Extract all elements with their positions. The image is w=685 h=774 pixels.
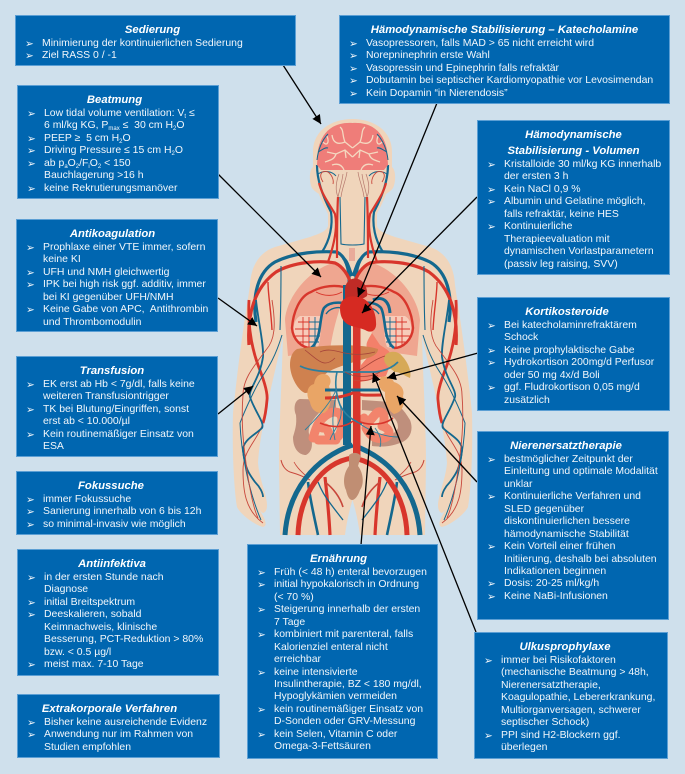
list: Transfusion: erst ab < 10.000/µl <box>43 416 130 427</box>
heading: Volumen: Stabilisierung - Volumen <box>507 144 640 156</box>
list: Sedierung <box>26 38 243 61</box>
list: Ernaehrung: Hypoglykämien vermeiden <box>274 691 397 702</box>
arrow: Ulkusprophylaxe to stomach <box>373 373 476 632</box>
list: Volumen: Kein NaCl 0,9 % <box>504 184 581 195</box>
list: Transfusion: ESA <box>43 441 64 452</box>
trachea <box>349 248 355 261</box>
heading: Beatmung: Beatmung <box>87 94 142 106</box>
list: Nierenersatztherapie: Kein Vorteil einer frühen <box>504 541 615 552</box>
list: Antikoagulation: Keine Gabe von APC, Antithrombin <box>43 304 208 315</box>
list: Nierenersatztherapie: Dosis: 20-25 ml/kg/h <box>504 578 599 589</box>
heading: Ulkusprophylaxe: Ulkusprophylaxe <box>519 641 611 653</box>
arrow: Beatmung to lung <box>218 174 321 277</box>
list: Nierenersatztherapie: SLED gegenüber <box>504 504 584 515</box>
list: Antikoagulation: und Thrombomodulin <box>43 317 141 328</box>
list: Beatmung: PEEP ≥ 5 cm H2O <box>44 133 131 145</box>
list: Kortikosteroide: zusätzlich <box>504 395 550 406</box>
panel: Katecholamine <box>339 15 670 104</box>
list: Ernaehrung: keine intensivierte <box>274 666 358 678</box>
body right half <box>352 119 472 535</box>
panel: Transfusion <box>16 356 218 457</box>
list: Transfusion: Kein routinemäßiger Einsatz von <box>43 429 194 440</box>
list: Antikoagulation: keine KI <box>43 254 81 265</box>
list: Kortikosteroide: oder 50 mg 4x/d Boli <box>504 370 600 381</box>
list: Volumen: Kontinuierliche <box>504 221 572 232</box>
list: Volumen: (passiv leg raising, SVV) <box>504 258 618 270</box>
list: Antikoagulation: Prophlaxe einer VTE immer, sofern <box>43 242 205 253</box>
list: Volumen: Albumin und Gelatine möglich, <box>504 196 646 207</box>
list: Extrakorporale Verfahren: Bisher keine ausreichende Evidenz <box>44 717 207 728</box>
list: Kortikosteroide: Hydrokortison 200mg/d Perfusor <box>504 357 654 368</box>
list: Ernaehrung: erreichbar <box>274 654 321 665</box>
list: Fokussuche: so minimal-invasiv wie möglich <box>43 519 186 530</box>
list: Ernaehrung: (< 70 %) <box>274 592 314 603</box>
list: Nierenersatztherapie: hämodynamische Stabilität <box>504 529 629 540</box>
small intestine <box>313 412 389 440</box>
list: Ulkusprophylaxe: Nierenersatztherapie, <box>501 680 601 691</box>
list: Transfusion: TK bei Blutung/Eingriffen, sonst <box>43 404 189 415</box>
list: Beatmung: Driving Pressure ≤ 15 cm H2O <box>44 145 183 157</box>
list: Transfusion: EK erst ab Hb < 7g/dl, falls keine <box>43 379 195 390</box>
list: Kortikosteroide: Keine prophylaktische Gabe <box>504 345 635 356</box>
list: Antikoagulation <box>27 242 208 328</box>
list: Kortikosteroide: Schock <box>504 332 538 343</box>
heading: Fokussuche: Fokussuche <box>78 480 144 492</box>
arrow: Ernaehrung to intestine <box>361 426 371 545</box>
list: Katecholamine <box>350 38 653 99</box>
panel: Ernaehrung <box>247 544 438 759</box>
list: Volumen <box>488 159 661 270</box>
list: Volumen: Therapieevaluation mit <box>504 234 610 245</box>
heading: Ernaehrung: Ernährung <box>310 553 367 565</box>
list: Ulkusprophylaxe: Multiorganversagen, schwerer <box>501 705 641 716</box>
list: Beatmung: keine Rekrutierungsmanöver <box>44 183 177 194</box>
list: Antiinfektiva: Keimnachweis, klinische <box>44 622 157 633</box>
panel: Antiinfektiva <box>17 549 219 676</box>
heading: Antiinfektiva: Antiinfektiva <box>78 558 146 570</box>
right colon <box>362 400 412 447</box>
central vessels <box>343 285 360 459</box>
heading: Volumen <box>507 129 640 156</box>
list: Ernaehrung: Früh (< 48 h) enteral bevorzugen <box>274 567 427 578</box>
list: Antikoagulation: IPK bei high risk ggf. additiv, immer <box>43 279 206 290</box>
list: Fokussuche <box>27 494 201 530</box>
heart <box>340 278 390 332</box>
list: Katecholamine: Norepninephrin erste Wahl <box>366 50 490 61</box>
list: Antikoagulation: UFH und NMH gleichwertig <box>43 267 169 278</box>
arrow: Transfusion to arm vessels <box>218 386 253 414</box>
list: Beatmung: Bauchlagerung >16 h <box>44 170 144 181</box>
panel: Kortikosteroide <box>477 297 670 411</box>
list: Nierenersatztherapie: Kontinuierliche Verfahren und <box>504 491 641 502</box>
body left half <box>233 119 352 535</box>
heading: Antikoagulation: Antikoagulation <box>70 228 155 240</box>
heading: Katecholamine: Hämodynamische Stabilisierung – Katecholamine <box>371 24 638 36</box>
arrow: Nierenersatztherapie to kidney <box>397 396 477 482</box>
left colon <box>293 399 336 455</box>
list: Ernaehrung: D-Sonden oder GRV-Messung <box>274 716 415 727</box>
list: Nierenersatztherapie <box>488 454 658 602</box>
list: Antiinfektiva: initial Breitspektrum <box>44 597 135 608</box>
list: Beatmung: ab paO2/FiO2 < 150 <box>44 158 131 170</box>
panel: Extrakorporale Verfahren <box>17 694 220 758</box>
heading: Nierenersatztherapie: Nierenersatztherapie <box>510 440 622 452</box>
list: Volumen: dynamischen Vorlastparametern <box>504 246 654 257</box>
list: Volumen: falls refraktär, keine HES <box>504 209 619 220</box>
left kidney <box>307 374 331 413</box>
right kidney <box>379 376 404 414</box>
panel: Volumen <box>477 120 670 275</box>
list: Extrakorporale Verfahren <box>28 717 207 753</box>
list: Ulkusprophylaxe: immer bei Risikofaktoren <box>501 655 616 666</box>
list: Nierenersatztherapie: Einleitung und optimale Modalität <box>504 466 658 477</box>
list: Ernaehrung: 7 Tage <box>274 617 305 628</box>
list: Ernaehrung: Steigerung innerhalb der ersten <box>274 604 420 615</box>
list: Katecholamine: Kein Dopamin “in Nierendosis” <box>366 88 508 99</box>
panel: Ulkusprophylaxe <box>474 632 668 759</box>
heading: Volumen: Hämodynamische <box>525 129 622 141</box>
list: Beatmung: Low tidal volume ventilation: Vt ≤ <box>44 108 195 120</box>
heading: Transfusion: Transfusion <box>80 365 144 377</box>
list: Ernaehrung <box>258 567 427 752</box>
list: Katecholamine: Dobutamin bei septischer Kardiomyopathie vor Levosimendan <box>366 75 653 86</box>
list: Ulkusprophylaxe: Koagulopathie, Lebererkrankung, <box>501 692 655 703</box>
panel: Beatmung <box>17 85 219 199</box>
abdominal vessels <box>300 350 398 447</box>
list: Antiinfektiva: Diagnose <box>44 584 88 595</box>
heading: Extrakorporale Verfahren: Extrakorporale Verfahren <box>42 703 177 715</box>
panel: Antikoagulation <box>16 219 218 332</box>
list: Ernaehrung: Omega-3-Fettsäuren <box>274 741 371 752</box>
heading: Kortikosteroide: Kortikosteroide <box>525 306 609 318</box>
list: Ernaehrung: Kalorienziel enteral nicht <box>274 642 388 653</box>
list: Fokussuche: immer Fokussuche <box>43 494 131 505</box>
arrow: Katecholamine to heart <box>358 103 437 297</box>
list: Transfusion: weiteren Transfusiontrigger <box>43 391 169 402</box>
list: Kortikosteroide: ggf. Fludrokortison 0,05 mg/d <box>504 382 640 393</box>
list: Transfusion <box>27 379 195 452</box>
list: Ernaehrung: kombiniert mit parenteral, falls <box>274 629 413 640</box>
arrow: Volumen to heart <box>362 197 477 313</box>
list: Antiinfektiva: Deeskalieren, sobald <box>44 609 141 620</box>
list: Antikoagulation: bei KI gegenüber UFH/NMH <box>43 292 174 303</box>
list: Nierenersatztherapie: diskontinuierlichen bessere <box>504 516 630 527</box>
liver <box>290 345 378 393</box>
list: Katecholamine: Vasopressoren, falls MAD > 65 nicht erreicht wird <box>366 38 594 49</box>
list: Ulkusprophylaxe: PPI sind H2-Blockern ggf. <box>501 730 621 741</box>
list: Ulkusprophylaxe: septischer Schock) <box>501 717 589 728</box>
list: Volumen: Kristalloide 30 ml/kg KG innerhalb <box>504 159 661 170</box>
list: Ernaehrung: kein Selen, Vitamin C oder <box>274 729 397 740</box>
list: Nierenersatztherapie: Initiierung, deshalb bei absoluten <box>504 554 657 564</box>
list: Kortikosteroide: Bei katecholaminrefraktärem <box>504 320 637 331</box>
list: Ulkusprophylaxe <box>485 655 655 753</box>
panel: Nierenersatztherapie <box>477 431 669 620</box>
panel: Sedierung <box>15 15 296 66</box>
list: Fokussuche: Sanierung innerhalb von 6 bis 12h <box>43 506 201 517</box>
arrow: Antikoagulation to arm vessels <box>218 298 257 326</box>
list: Extrakorporale Verfahren: Anwendung nur im Rahmen von <box>44 729 193 740</box>
arrow: Sedierung to brain <box>283 65 321 124</box>
list: Nierenersatztherapie: Indikationen beginnen <box>504 566 606 577</box>
list: Ernaehrung: Insulintherapie, BZ < 180 mg/dl, <box>274 679 422 690</box>
list: Antiinfektiva: in der ersten Stunde nach <box>44 572 164 583</box>
list: Antiinfektiva: meist max. 7-10 Tage <box>44 659 144 670</box>
list: Antiinfektiva: bzw. < 0.5 µg/l <box>44 647 111 658</box>
list: Beatmung: 6 ml/kg KG, Pmax ≤ 30 cm H2O <box>44 120 184 132</box>
heading: Sedierung: Sedierung <box>125 24 180 36</box>
panel: Fokussuche <box>16 471 218 535</box>
stomach and pancreas <box>360 333 392 382</box>
arrow: Kortikosteroide to adrenal <box>387 353 478 378</box>
list: Nierenersatztherapie: bestmöglicher Zeitpunkt der <box>504 454 633 465</box>
list: Antiinfektiva <box>28 572 203 670</box>
list: Beatmung <box>28 108 195 194</box>
bladder <box>344 453 363 500</box>
list: Ernaehrung: kein routinemäßiger Einsatz von <box>274 704 423 715</box>
list: Kortikosteroide <box>488 320 654 406</box>
list: Volumen: der ersten 3 h <box>504 171 568 182</box>
list: Antiinfektiva: Besserung, PCT-Reduktion > 80% <box>44 634 203 645</box>
list: Sedierung: Minimierung der kontinuierlichen Sedierung <box>42 38 243 49</box>
list: Extrakorporale Verfahren: Studien empfohlen <box>44 742 131 753</box>
list: Sedierung: Ziel RASS 0 / -1 <box>42 50 117 61</box>
spleen <box>384 352 411 378</box>
list: Katecholamine: Vasopressin und Epinephrin falls refraktär <box>366 63 559 74</box>
list: Nierenersatztherapie: unklar <box>504 479 532 490</box>
list: Nierenersatztherapie: Keine NaBi-Infusionen <box>504 591 608 602</box>
list: Ulkusprophylaxe: (mechanische Beatmung > 48h, <box>501 667 649 678</box>
list: Ulkusprophylaxe: überlegen <box>501 742 547 753</box>
list: Ernaehrung: initial hypokalorisch in Ordnung <box>274 579 419 590</box>
